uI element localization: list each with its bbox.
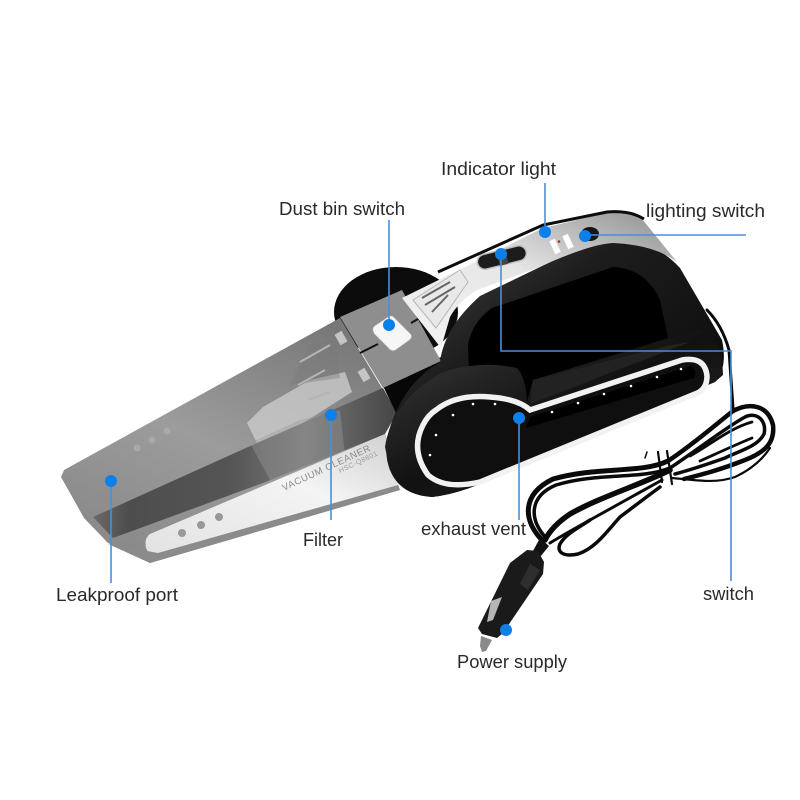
transparent lamp window	[413, 270, 468, 328]
lower left loop	[559, 487, 660, 555]
grey dust bin latch plate	[340, 290, 441, 388]
label: Power supply: Power supply	[457, 651, 568, 672]
exhaust vent white ring	[418, 359, 707, 485]
top edge highlight	[438, 212, 644, 272]
white lower panel with printed model text: HSC-Q8801	[338, 451, 379, 475]
label: Dust bin switch	[279, 198, 405, 331]
label: Leakproof port: Leakproof port	[56, 584, 178, 605]
label: Indicator light: Indicator light	[441, 158, 556, 179]
car cigarette lighter plug	[478, 538, 549, 652]
white lower panel with printed model text	[108, 434, 400, 563]
slide power switch	[476, 244, 528, 271]
transparent dust nozzle	[61, 318, 400, 563]
label: Indicator light	[441, 158, 556, 238]
label: Dust bin switch: Dust bin switch	[279, 198, 405, 219]
icon: vacuum cleaner product	[61, 212, 724, 563]
label: Filter: Filter	[303, 529, 343, 550]
black main body	[386, 238, 724, 497]
power cord	[528, 310, 773, 555]
lighting switch button	[581, 227, 599, 241]
bundle returning to plug	[545, 470, 670, 540]
rear round motor housing	[334, 267, 458, 357]
label: Power supply	[457, 624, 568, 672]
left loop upper strands	[528, 461, 668, 541]
label: exhaust vent	[421, 412, 526, 539]
right loop strands	[668, 406, 773, 479]
label: switch	[495, 248, 754, 604]
stray wire end	[645, 452, 647, 458]
panel recess	[530, 342, 690, 404]
silver top control plate	[402, 213, 677, 348]
label: switch: switch	[703, 583, 754, 604]
handle opening	[468, 267, 668, 404]
label: exhaust vent: exhaust vent	[421, 518, 526, 539]
label: lighting switch: lighting switch	[646, 200, 765, 221]
label: Leakproof port	[56, 475, 178, 605]
indicator light slots	[552, 235, 571, 253]
thin lower strand on right	[672, 448, 770, 481]
cable from handle to bundle	[707, 310, 733, 408]
dust bin switch button	[372, 316, 412, 351]
black wedge between nozzle and body	[383, 355, 445, 415]
white lower panel with printed model text: VACUUM CLEANER	[281, 443, 372, 494]
lower body lobe	[385, 330, 723, 497]
cable tie	[658, 451, 672, 484]
label: Filter	[303, 409, 343, 550]
label: lighting switch	[579, 200, 765, 242]
